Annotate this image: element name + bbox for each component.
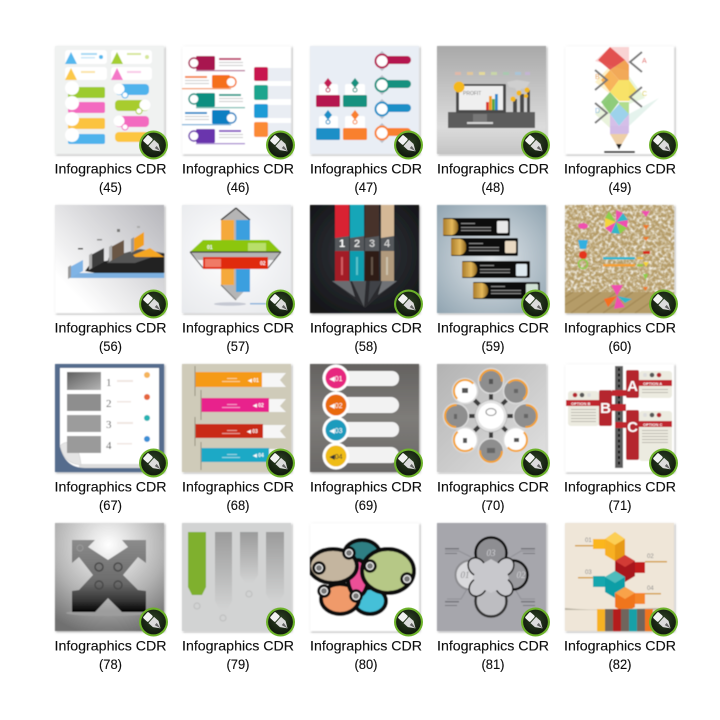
caption: (58): [354, 338, 378, 354]
caption: Infographics CDR: [564, 638, 676, 654]
thumbnail: monitor with chart: PROFIT: [463, 91, 481, 97]
thumbnail: bubble cluster: [309, 523, 419, 631]
caption: Infographics CDR: [54, 638, 167, 654]
caption: Infographics CDR: [564, 478, 676, 494]
icon: CorelDRAW badge: [521, 608, 550, 636]
thumbnail: numbered arrows: 4: [384, 238, 391, 250]
thumbnail: pencil with diamonds: D: [595, 108, 600, 115]
thumbnail: numbered discs: ◀03: [329, 428, 343, 435]
caption: [437, 638, 549, 672]
thumbnail: ribbons with flags: ◀ 03: [246, 429, 258, 435]
thumbnail: gray X arrows: [55, 523, 164, 631]
caption: [54, 478, 166, 513]
thumbnail: stacked tabs: [182, 46, 291, 154]
icon: CorelDRAW badge: [266, 448, 295, 478]
icon: CorelDRAW badge: [649, 448, 678, 478]
caption: (68): [226, 497, 250, 513]
caption: [54, 638, 166, 672]
panel: Infographics CDR (56): [54, 205, 168, 354]
caption: Infographics CDR: [182, 160, 294, 176]
panel: Infographics CDR (81): [437, 523, 550, 672]
caption: (69): [354, 497, 378, 513]
panel: Infographics CDR (80): [309, 523, 423, 672]
caption: (45): [99, 179, 122, 195]
caption: Infographics CDR: [310, 638, 422, 654]
caption: Infographics CDR: [437, 478, 549, 494]
caption: (56): [99, 338, 122, 354]
thumbnail: pills and cards: [310, 46, 419, 154]
thumbnail: options A B C: A: [627, 378, 638, 395]
panel: Infographics CDR (69): [310, 364, 423, 513]
caption: Infographics CDR: [54, 478, 167, 494]
thumbnail: numbered arrows: 3: [369, 238, 375, 250]
caption: Infographics CDR: [182, 320, 294, 336]
panel: Infographics CDR (58): [310, 205, 423, 354]
icon: CorelDRAW badge: [649, 608, 678, 636]
caption: Infographics CDR: [564, 320, 676, 336]
caption: [437, 160, 549, 195]
caption: [54, 320, 166, 354]
caption: [437, 320, 549, 354]
thumbnail: note page with numbers: 3: [106, 419, 112, 431]
thumbnail: gray flower: 01: [460, 570, 470, 580]
caption: (49): [608, 179, 632, 195]
thumbnail: numbered discs: ◀02: [329, 403, 343, 410]
thumbnail: note page with numbers: 1: [106, 377, 112, 389]
caption: [310, 638, 422, 672]
panel: Infographics CDR (71): [564, 364, 678, 513]
thumbnail: numbered discs: [310, 364, 419, 472]
panel: Infographics CDR (59): [437, 205, 550, 354]
caption: (57): [226, 338, 250, 354]
icon: CorelDRAW badge: [649, 290, 678, 318]
caption: [564, 320, 676, 354]
thumbnail: colorful labels: [55, 46, 164, 154]
caption: [564, 638, 676, 672]
icon: CorelDRAW badge: [521, 290, 550, 318]
panel: Infographics CDR (49): [564, 46, 678, 195]
caption: (78): [99, 656, 122, 672]
caption: Infographics CDR: [182, 478, 294, 494]
thumbnail: grunge wood with pinwheels: [565, 205, 674, 313]
caption: (67): [99, 497, 122, 513]
thumbnail: crossing ribbons: [182, 205, 291, 313]
caption: Infographics CDR: [310, 160, 422, 176]
thumbnail: options A B C: OPTION C: [643, 422, 662, 427]
caption: [182, 638, 294, 672]
thumbnail: isometric blocks: 03: [585, 570, 592, 576]
thumbnail: isometric blocks: 01: [585, 538, 592, 544]
caption: (59): [482, 338, 504, 354]
thumbnail: pencil with diamonds: A: [642, 58, 647, 65]
caption: Infographics CDR: [54, 160, 167, 176]
caption: Infographics CDR: [437, 320, 549, 336]
thumbnail: gray flower: 02: [516, 570, 526, 580]
thumbnail: pencil with diamonds: B: [595, 74, 600, 81]
thumbnail: numbered arrows: [310, 205, 419, 313]
thumbnail: ribbons with flags: [182, 364, 291, 472]
panel: Infographics CDR (45): [54, 46, 168, 195]
thumbnail: pencil with diamonds: C: [642, 91, 647, 98]
caption: (82): [608, 656, 632, 672]
thumbnail: isometric blocks: [565, 523, 674, 631]
thumbnail: numbered arrows: 2: [354, 238, 360, 250]
thumbnail: options A B C: B: [600, 400, 611, 417]
thumbnail: ribbons with flags: ◀ 04: [252, 453, 264, 459]
icon: CorelDRAW badge: [394, 130, 423, 160]
panel: Infographics CDR (78): [54, 523, 168, 672]
panel: Infographics CDR (68): [182, 364, 295, 513]
caption: [310, 160, 422, 195]
caption: [564, 160, 676, 195]
thumbnail: note page with numbers: 2: [106, 398, 112, 410]
thumbnail: note page with numbers: 4: [106, 440, 112, 452]
panel: Infographics CDR (67): [54, 364, 168, 513]
caption: Infographics CDR: [310, 320, 422, 336]
caption: [182, 160, 294, 195]
thumbnail: isometric blocks: 04: [647, 586, 654, 592]
thumbnail: crossing ribbons: 02: [260, 261, 266, 267]
thumbnail: crossing ribbons: 01: [207, 245, 213, 251]
caption: Infographics CDR: [564, 160, 676, 176]
panel: Infographics CDR (46): [182, 46, 295, 195]
panel: Infographics CDR (79): [182, 523, 295, 672]
caption: (80): [354, 656, 378, 672]
thumbnail: numbered discs: ◀01: [329, 376, 343, 383]
thumbnail: black gold bars: [437, 205, 546, 313]
caption: Infographics CDR: [437, 638, 549, 654]
caption: (46): [226, 179, 250, 195]
caption: (71): [608, 497, 632, 513]
thumbnail: gray flower: 03: [486, 548, 496, 558]
thumbnail: options A B C: [565, 364, 674, 472]
icon: CorelDRAW badge: [649, 130, 678, 160]
thumbnail: note page with numbers: [55, 364, 164, 472]
thumbnail: gray flower: [437, 523, 546, 631]
caption: (81): [482, 656, 504, 672]
icon: CorelDRAW badge: [394, 608, 423, 636]
caption: Infographics CDR: [54, 320, 167, 336]
thumbnail: hanging tabs: [182, 523, 291, 631]
icon: CorelDRAW badge: [266, 608, 295, 636]
thumbnail: isometric blocks: 02: [647, 554, 654, 560]
caption: [310, 320, 422, 354]
icon: CorelDRAW badge: [139, 608, 168, 636]
caption: (60): [608, 338, 632, 354]
panel: Infographics CDR (60): [564, 205, 678, 354]
icon: CorelDRAW badge: [266, 130, 295, 160]
thumbnail: numbered discs: ◀04: [329, 454, 343, 461]
thumbnail: ribbons with flags: ◀ 01: [247, 378, 259, 384]
icon: CorelDRAW badge: [521, 448, 550, 478]
icon: CorelDRAW badge: [394, 448, 423, 478]
caption: [564, 478, 676, 513]
thumbnail: numbered arrows: 1: [339, 238, 345, 250]
caption: (79): [226, 656, 250, 672]
caption: Infographics CDR: [437, 160, 549, 176]
caption: (47): [354, 179, 378, 195]
thumbnail: ribbons with flags: ◀ 02: [252, 403, 264, 409]
panel: Infographics CDR (57): [182, 205, 295, 354]
panel: Infographics CDR (82): [564, 523, 678, 672]
thumbnail: pencil with diamonds: [565, 46, 674, 154]
icon: CorelDRAW badge: [139, 448, 168, 478]
caption: [182, 478, 294, 513]
caption: [310, 478, 422, 513]
icon: CorelDRAW badge: [394, 290, 423, 318]
panel: Infographics CDR (47): [310, 46, 423, 195]
thumbnail: options A B C: C: [627, 419, 638, 436]
caption: Infographics CDR: [310, 478, 422, 494]
icon: CorelDRAW badge: [139, 130, 168, 160]
thumbnail: circle wheel: [437, 364, 546, 472]
panel: Infographics CDR (48): [437, 46, 550, 195]
icon: CorelDRAW badge: [521, 130, 550, 160]
caption: [182, 320, 294, 354]
thumbnail: options A B C: OPTION A: [643, 381, 662, 386]
caption: [437, 478, 549, 513]
caption: (70): [482, 497, 504, 513]
caption: (48): [482, 179, 504, 195]
thumbnail: 3D staircase: [55, 205, 164, 313]
icon: CorelDRAW badge: [266, 290, 295, 318]
caption: Infographics CDR: [182, 638, 294, 654]
icon: CorelDRAW badge: [139, 290, 168, 318]
thumbnail: options A B C: OPTION B: [571, 401, 590, 406]
thumbnail: monitor with chart: [437, 46, 546, 154]
panel: Infographics CDR (70): [437, 364, 550, 513]
caption: [54, 160, 166, 195]
